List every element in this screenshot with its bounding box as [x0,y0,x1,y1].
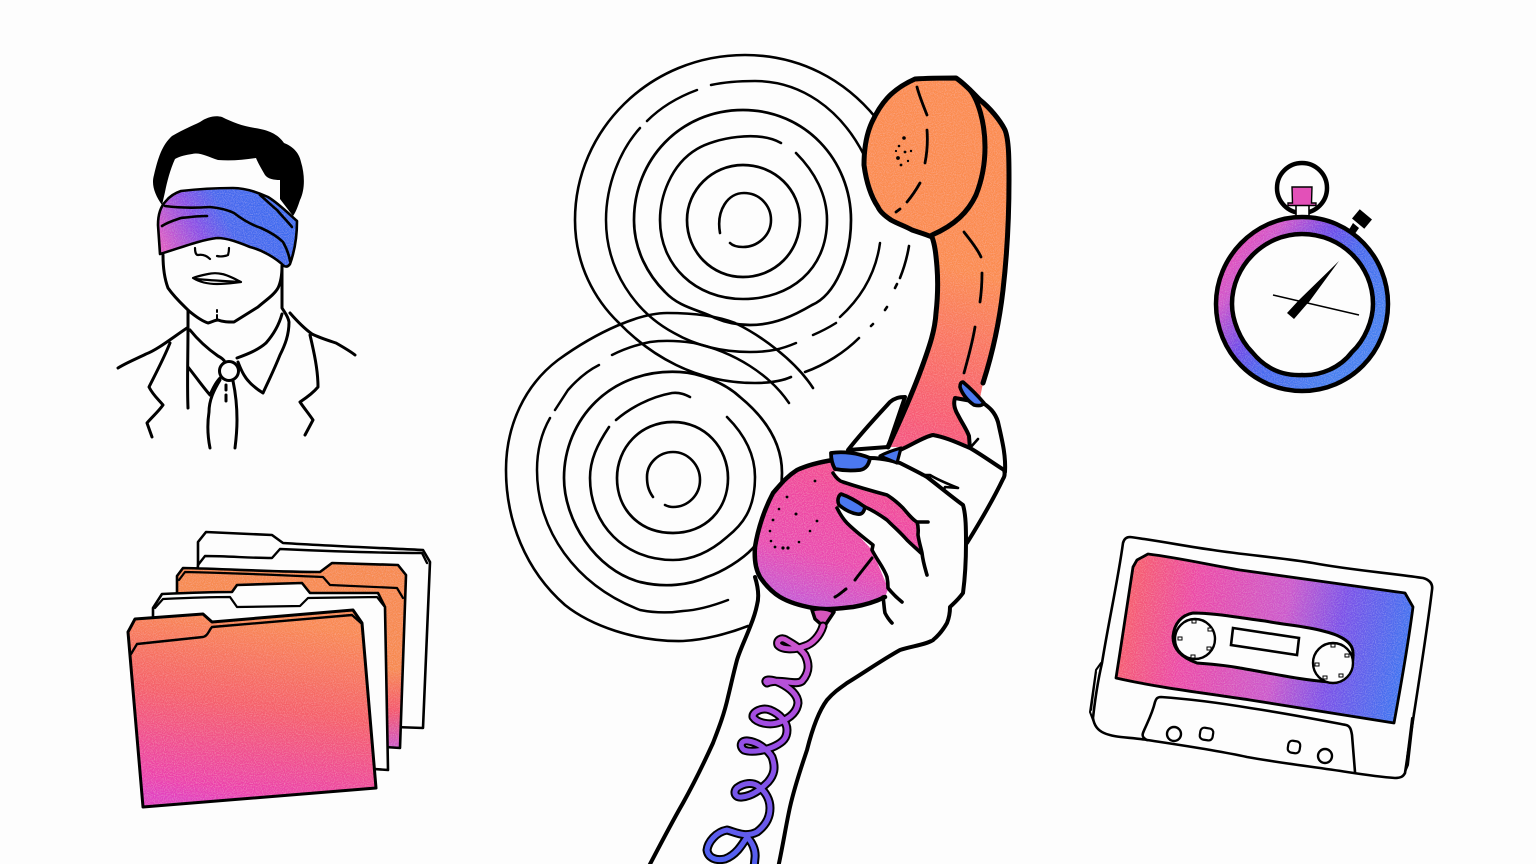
tie knot [220,362,238,380]
thumb tick [969,438,978,448]
coiled cord outline [707,626,823,864]
cord connector [812,609,834,627]
label screen outline [1116,554,1413,723]
earpiece holes [895,136,912,166]
handset outline [864,78,1009,447]
jacket [118,313,355,437]
loop [1277,163,1327,213]
top spiral [575,55,909,383]
front orange folder [128,610,376,807]
arm outline [648,577,933,864]
lips [193,273,241,284]
chin mark [216,310,218,320]
face and neck [163,255,282,323]
icon: stopwatch [1216,163,1388,391]
crown [1288,187,1316,206]
handset body [864,77,1010,448]
mouthpiece dashes [835,558,872,597]
right reel [1313,643,1353,683]
side tabs [1090,663,1414,772]
blindfold fill [158,188,297,267]
icon: sound wave rings [506,55,909,641]
tape window [1173,613,1353,682]
holes [1167,727,1181,741]
middle white folder [153,583,388,770]
body ring outline [1216,217,1388,391]
earpiece details [896,87,982,373]
mouthpiece holes [769,480,818,550]
body ring fill [1216,217,1388,391]
finger two edges [837,507,921,623]
icon: hand holding telephone handset [648,77,1010,864]
mouthpiece fill [755,460,900,609]
nose [195,248,229,259]
handset back finger [848,397,905,450]
hair [153,116,304,216]
pink sliver between fingers [836,474,922,553]
shell [1093,537,1432,778]
hand outline [870,435,1005,640]
back white folder [190,532,430,728]
lower trapezoid [1143,697,1355,772]
thumb [954,398,1005,472]
icon: blindfolded man [118,116,355,448]
hand and fingers [834,435,1005,640]
finger one lower edge [833,473,928,575]
mouthpiece outline [755,460,885,609]
stem [1296,204,1309,218]
bottom spiral [506,313,813,641]
window slot [1231,628,1299,655]
nail: index finger [831,452,870,470]
icon: file folders [128,532,430,807]
side button [1347,209,1372,238]
minute hand [1287,261,1339,319]
coiled cord colour [707,626,823,864]
collar [188,314,282,395]
nail: rear finger [880,448,901,463]
neck lines [188,266,289,408]
necktie [208,380,237,448]
left reel [1175,619,1215,659]
nail: middle finger [838,494,865,514]
nail: thumb [960,382,984,406]
arm fill [650,560,952,864]
second hand [1273,295,1359,315]
earpiece edge [932,90,985,235]
blindfold outline and folds [158,188,297,267]
label screen fill [1116,554,1413,723]
knuckle detail [922,475,958,490]
icon: cassette tape [1090,537,1432,778]
orange folder [177,563,406,748]
